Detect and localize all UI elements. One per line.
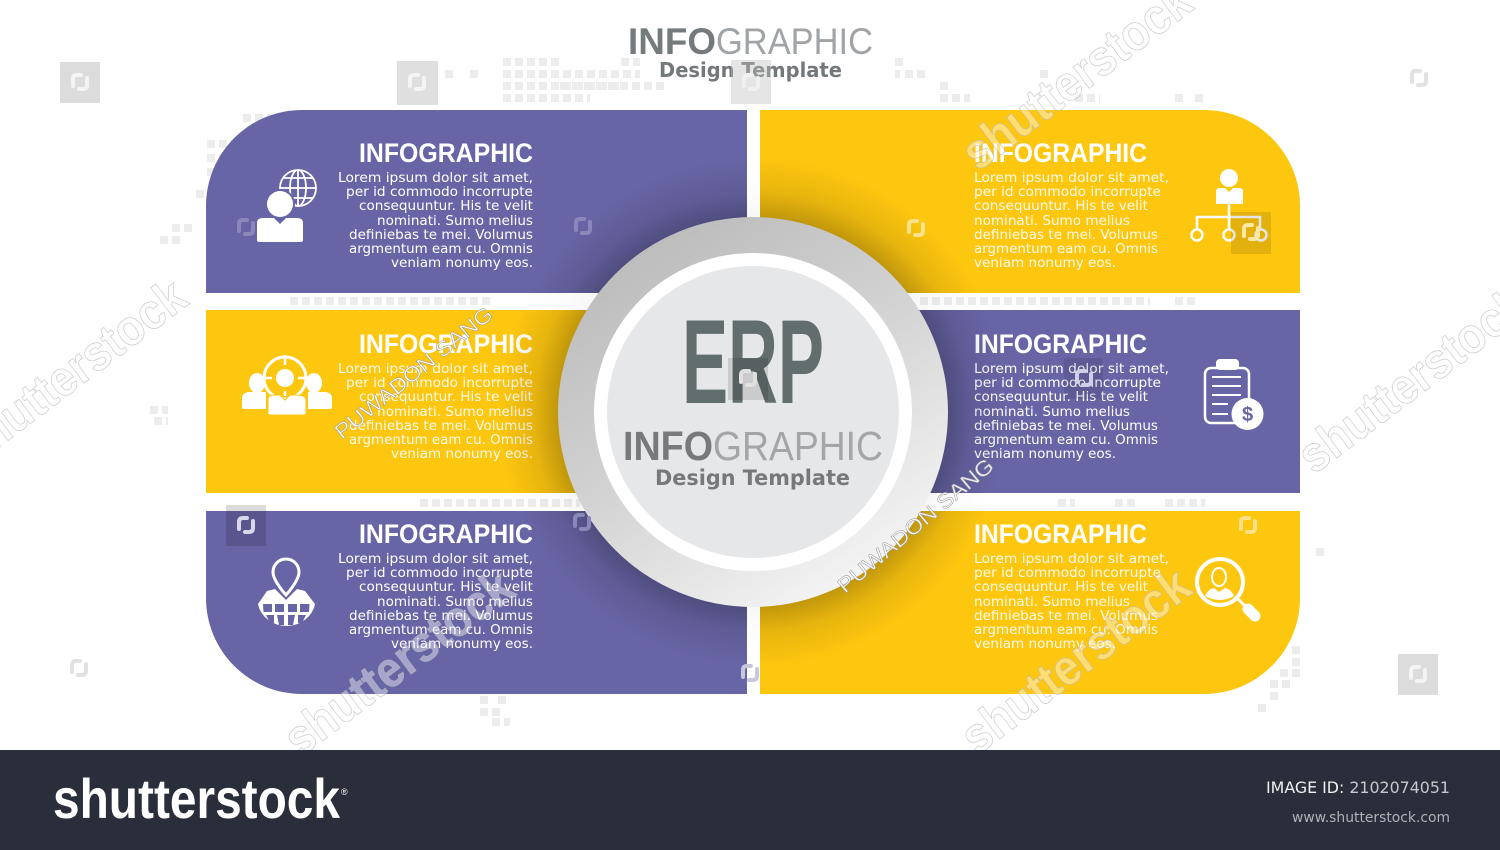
watermarks: shutterstock (273, 558, 524, 767)
body text: nominati. Sumo melius (974, 595, 1130, 610)
watermarks: shutterstock (950, 556, 1201, 765)
body text: per id commodo incorrupte (974, 185, 1161, 200)
body text: Lorem ipsum dolor sit amet, (974, 552, 1169, 567)
body text: per id commodo incorrupte (346, 185, 533, 200)
watermark tiles (60, 60, 1438, 695)
panel: bottom right (760, 511, 1300, 694)
title: INFO (628, 21, 716, 62)
body text: Lorem ipsum dolor sit amet, (338, 362, 533, 377)
body text (338, 171, 533, 271)
icon: clipboard with dollar: $ (1242, 404, 1253, 426)
footer bar (0, 750, 1500, 850)
body text (974, 552, 1169, 652)
body text: veniam nonumy eos. (974, 256, 1116, 271)
body text: nominati. Sumo melius (377, 405, 533, 420)
center subtitle: INFO (623, 423, 713, 469)
footer logo: shutterstock (53, 767, 341, 830)
title: Design Template (659, 58, 842, 82)
body text: definiebas te mei. Volumus (349, 228, 533, 243)
body text: consequuntur. His te velit (359, 199, 533, 214)
body text: argmentum eam cu. Omnis (349, 623, 533, 638)
body text (974, 362, 1169, 462)
body text: consequuntur. His te velit (359, 580, 533, 595)
heading: INFOGRAPHIC (974, 138, 1147, 168)
heading: INFOGRAPHIC (974, 519, 1147, 549)
icon: magnifier with person (1197, 559, 1255, 616)
body text: per id commodo incorrupte (346, 566, 533, 581)
panel: middle left (206, 310, 606, 493)
icon: globe with pin (258, 559, 315, 626)
body text: consequuntur. His te velit (974, 390, 1148, 405)
panel: top right (760, 110, 1300, 293)
watermarks: PUWADON SANG (833, 454, 998, 598)
body text: argmentum eam cu. Omnis (974, 433, 1158, 448)
icon: team target (242, 355, 332, 415)
decorative map dots (150, 62, 1324, 722)
body text (338, 552, 533, 652)
body text: definiebas te mei. Volumus (974, 609, 1158, 624)
heading: INFOGRAPHIC (359, 138, 533, 168)
body text: definiebas te mei. Volumus (974, 228, 1158, 243)
body text: veniam nonumy eos. (391, 637, 533, 652)
body text: consequuntur. His te velit (359, 390, 533, 405)
body text: veniam nonumy eos. (974, 447, 1116, 462)
heading: INFOGRAPHIC (359, 519, 533, 549)
body text: nominati. Sumo melius (974, 214, 1130, 229)
panel: middle right (900, 310, 1300, 493)
body text: definiebas te mei. Volumus (974, 419, 1158, 434)
body text: argmentum eam cu. Omnis (974, 242, 1158, 257)
panel: top left (206, 110, 747, 293)
registered mark: ® (341, 787, 348, 797)
center subtitle: GRAPHIC (713, 423, 883, 469)
body text: argmentum eam cu. Omnis (349, 433, 533, 448)
body text: per id commodo incorrupte (974, 376, 1161, 391)
body text: nominati. Sumo melius (377, 214, 533, 229)
body text: Lorem ipsum dolor sit amet, (338, 552, 533, 567)
body text: Lorem ipsum dolor sit amet, (974, 171, 1169, 186)
icon: org chart (1192, 169, 1266, 240)
icon: clipboard with dollar (1205, 359, 1264, 430)
body text: per id commodo incorrupte (974, 566, 1161, 581)
body text: consequuntur. His te velit (974, 580, 1148, 595)
body text (974, 171, 1169, 271)
body text: definiebas te mei. Volumus (349, 419, 533, 434)
body text: Lorem ipsum dolor sit amet, (338, 171, 533, 186)
body text: veniam nonumy eos. (391, 256, 533, 271)
title (628, 21, 873, 82)
body text: nominati. Sumo melius (974, 405, 1130, 420)
body text: per id commodo incorrupte (346, 376, 533, 391)
image id: IMAGE ID: 2102074051 (1266, 778, 1450, 797)
icon: person with globe (257, 170, 316, 242)
body text: argmentum eam cu. Omnis (349, 242, 533, 257)
panel: bottom left (206, 511, 747, 694)
body text: veniam nonumy eos. (391, 447, 533, 462)
body text: argmentum eam cu. Omnis (974, 623, 1158, 638)
body text: Lorem ipsum dolor sit amet, (974, 362, 1169, 377)
heading: INFOGRAPHIC (974, 329, 1147, 359)
center subtitle: Design Template (655, 466, 850, 490)
center heading: ERP (682, 295, 824, 429)
body text: nominati. Sumo melius (377, 595, 533, 610)
heading: INFOGRAPHIC (359, 329, 533, 359)
center subtitle (623, 423, 883, 490)
body text: consequuntur. His te velit (974, 199, 1148, 214)
watermarks: PUWADON SANG (331, 303, 497, 444)
site url: www.shutterstock.com (1292, 810, 1450, 826)
center circle (511, 170, 994, 654)
body text: veniam nonumy eos. (974, 637, 1116, 652)
title: GRAPHIC (716, 21, 873, 62)
body text: definiebas te mei. Volumus (349, 609, 533, 624)
body text (338, 362, 533, 462)
